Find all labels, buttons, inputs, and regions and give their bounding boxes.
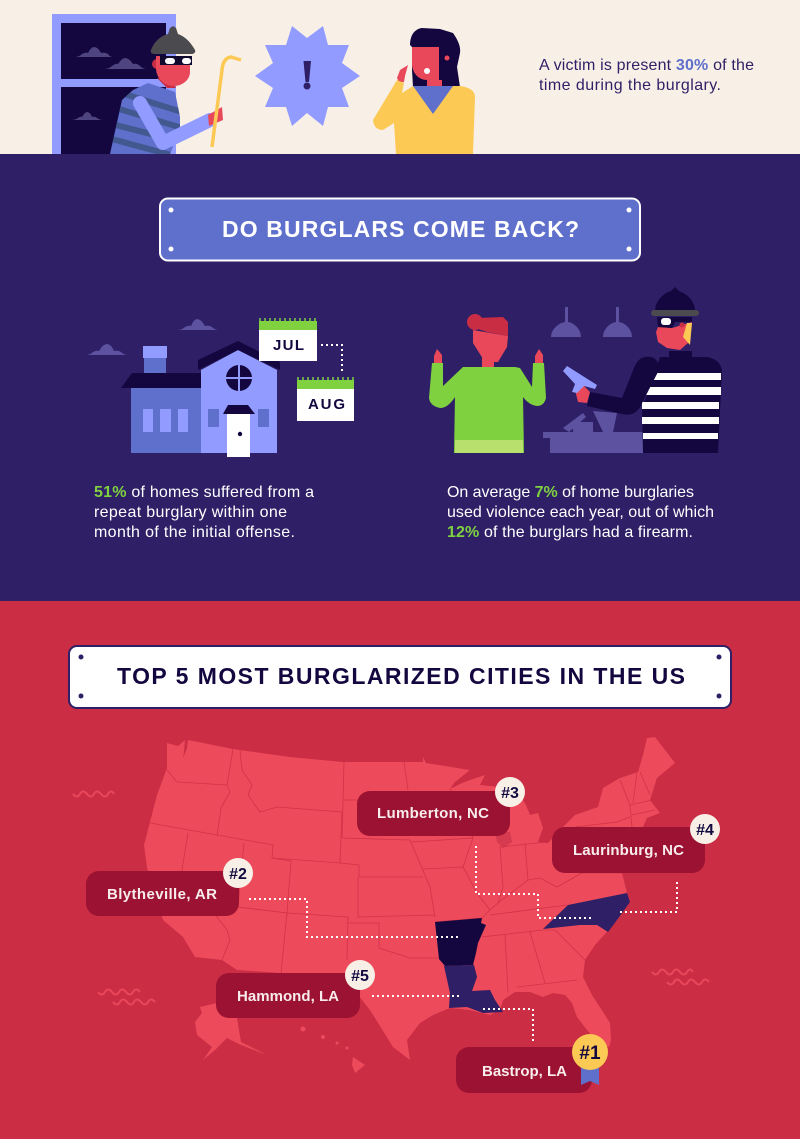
label: Hammond [216,960,375,1018]
label: Lumberton [357,777,525,836]
heading: do burglars come back [160,198,640,260]
illustration: house with calendars [85,318,354,457]
figure: burglar with gun [563,287,722,453]
icon: calendar August: AUG [308,396,345,413]
icon: alert starburst [255,26,360,126]
state: North Carolina [543,893,630,932]
heading: top 5 cities [69,646,731,708]
connector: Hammond [372,995,460,997]
icon: calendar July [259,318,317,361]
panel: do burglars come back [0,154,800,601]
label: Bastrop: #1 [579,1043,601,1064]
connector: Lumberton [476,846,593,918]
label: Lumberton: Lumberton, NC [377,805,489,822]
text: repeat burglary statistic: 51% of homes suffered from a [94,484,314,501]
icon: calendar August [297,377,354,421]
text: victim statistic: A victim is present 30% of the [539,57,754,74]
icon: window [52,14,176,154]
illustration: surprised woman [373,28,475,154]
panel: top 5 most burglarized cities [0,601,800,1139]
state: Arkansas [435,918,486,966]
heading: do burglars come back: DO BURGLARS COME BACK? [222,216,579,242]
text: violence statistic: On average 7% of home burglaries [447,484,694,501]
label: Bastrop [456,1034,608,1093]
illustration: burglar with gun and victim [429,287,722,453]
heading: top 5 cities: TOP 5 MOST BURGLARIZED CITIES IN THE US [117,663,685,689]
text: repeat burglary statistic [94,484,314,541]
connector: Laurinburg [620,882,677,912]
map: Alaska and Hawaii [195,1003,365,1073]
label: Laurinburg: #4 [696,822,714,839]
text: violence statistic: used violence each year, out of which [447,504,714,521]
icon: calendar July: JUL [273,337,304,354]
text: violence statistic [447,484,714,541]
label: Lumberton: #3 [501,785,519,802]
lake: Michigan [495,832,512,848]
label: Hammond: Hammond, LA [237,988,339,1005]
connector: Bastrop [483,1009,533,1041]
text: repeat burglary statistic: month of the initial offense. [94,524,295,541]
label: Bastrop: Bastrop, LA [482,1063,567,1080]
label: Blytheville [86,858,253,916]
label: Hammond: #5 [351,968,369,985]
illustration: burglar with crowbar [108,26,241,158]
figure: victim with raised hands [429,314,546,453]
map: United States [144,737,675,1073]
label: Blytheville: #2 [229,866,247,883]
label: Laurinburg: Laurinburg, NC [573,842,684,859]
connector: Blytheville [249,899,460,937]
connector: dotted July to August [321,345,342,371]
map: state borders [150,749,655,993]
state: Louisiana [444,965,503,1013]
text: violence statistic: 12% of the burglars had a firearm. [447,524,693,541]
decoration: waves [73,792,709,1004]
text: repeat burglary statistic: repeat burglary within one [94,504,287,521]
text: victim statistic line two: time during the burglary. [539,77,721,94]
label: Blytheville: Blytheville, AR [107,886,217,903]
label: Laurinburg [552,814,720,873]
panel: victim present [0,0,800,158]
